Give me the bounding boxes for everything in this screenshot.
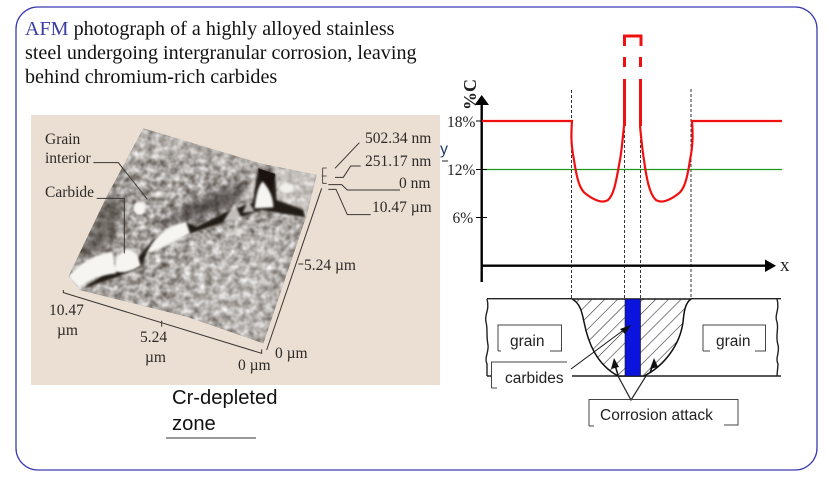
axes	[474, 95, 776, 282]
carbides	[68, 179, 294, 288]
grain edges	[486, 299, 781, 376]
chart: chromium concentration profile	[440, 36, 790, 298]
dashed guides	[572, 89, 691, 298]
Cr-depleted zone label: zone	[172, 413, 216, 435]
depleted zone	[572, 299, 691, 376]
grain labels: grain	[716, 333, 750, 350]
AFM labels: µm	[145, 349, 166, 366]
AFM labels: 502.34 nm	[365, 130, 431, 147]
carbides label	[492, 325, 658, 388]
AFM labels: 10.47	[49, 302, 84, 319]
chart labels: 12%	[447, 162, 476, 179]
corroded channel	[625, 299, 640, 376]
chart labels: 6%	[452, 210, 473, 227]
chart labels: 18%	[447, 114, 476, 131]
AFM labels: 5.24 µm	[304, 257, 356, 274]
AFM labels: Carbide	[45, 184, 94, 201]
heading text: steel undergoing intergranular corrosion, leaving	[25, 42, 417, 64]
corrosion attack label	[589, 376, 738, 426]
panel: AFM photograph	[31, 115, 440, 385]
axes and leaders	[63, 143, 400, 353]
corrosion attack label: Corrosion attack	[600, 407, 713, 424]
grain labels	[498, 325, 766, 351]
AFM labels: 5.24	[140, 329, 167, 346]
chart labels	[447, 71, 790, 276]
red profile	[482, 36, 782, 202]
AFM labels	[45, 130, 432, 374]
chart labels: %Cr	[460, 71, 480, 110]
heading text: AFM photograph of a highly alloyed stainless	[25, 18, 394, 40]
AFM labels: 0 nm	[399, 175, 430, 192]
AFM labels: 0 µm	[238, 357, 271, 374]
carbides label: carbides	[505, 370, 564, 387]
threshold line	[482, 168, 782, 170]
AFM labels: µm	[57, 322, 78, 339]
AFM labels: 0 µm	[275, 345, 308, 362]
y label: y	[440, 141, 448, 158]
AFM labels: 10.47 µm	[372, 199, 432, 216]
Cr-depleted zone label	[166, 387, 277, 438]
heading text: behind chromium-rich carbides	[25, 66, 277, 88]
grain labels: grain	[510, 333, 544, 350]
AFM surface	[63, 128, 400, 353]
AFM labels: interior	[45, 150, 91, 167]
chart labels: x	[780, 255, 790, 276]
AFM labels: Grain	[45, 131, 81, 148]
Cr-depleted zone label: Cr-depleted	[172, 387, 277, 409]
AFM labels: 251.17 nm	[365, 153, 431, 170]
grain boundary crack	[82, 168, 305, 289]
diagram: corroded grain boundary cross-section	[486, 299, 781, 426]
